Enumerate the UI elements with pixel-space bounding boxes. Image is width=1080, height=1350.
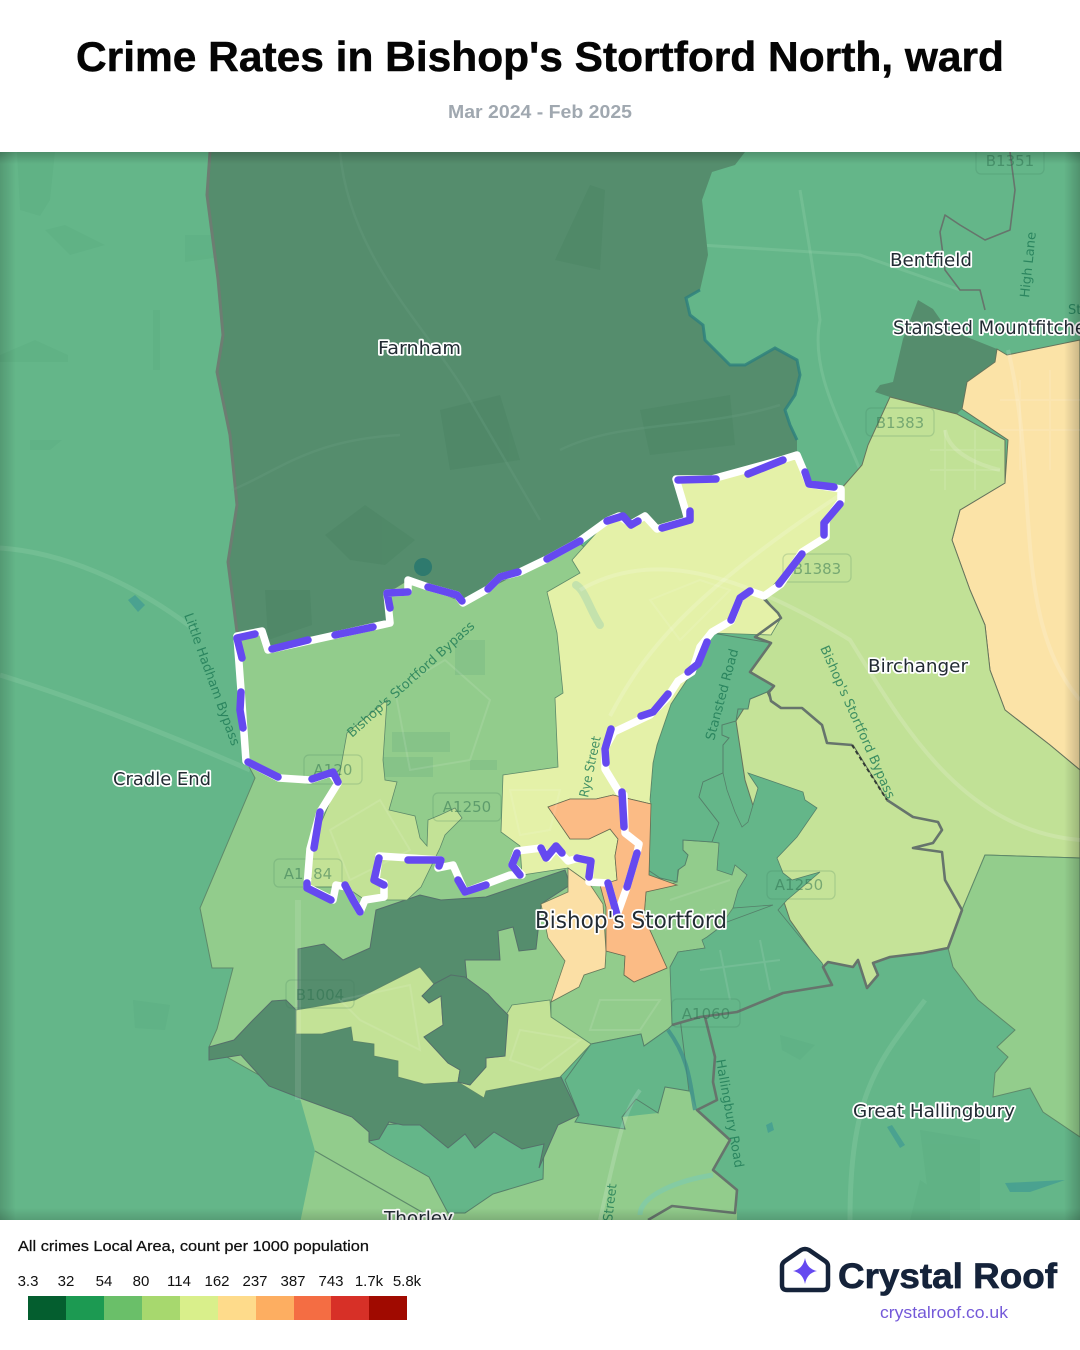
local roads and street texture <box>298 350 1080 1220</box>
road names <box>180 231 1080 1222</box>
water: lower river <box>668 1030 695 1110</box>
road shields <box>274 146 1044 1027</box>
road shields: A1250 <box>443 798 491 816</box>
legend scale labels: 5.8k <box>393 1273 422 1290</box>
region: dark middle <box>422 975 508 1085</box>
region: south-east teal <box>670 773 832 1025</box>
region: ward pale yellow-green <box>501 455 841 884</box>
title: Crime Rates in Bishop's Stortford North, ward <box>76 33 1004 80</box>
logo: Crystal Roof <box>782 1249 1057 1322</box>
faint background roads <box>0 190 960 1220</box>
region: lower Birchanger <box>736 692 962 988</box>
Farnham west boundary <box>207 152 237 632</box>
road names: High Lane <box>1018 231 1040 298</box>
place labels <box>113 250 1080 1229</box>
region: A120 yellow-green <box>307 700 462 900</box>
legend scale labels: 162 <box>204 1273 230 1290</box>
region: broad light green base <box>200 542 700 1098</box>
place labels: Farnham <box>378 338 461 359</box>
darker patches in west ward <box>383 640 497 777</box>
region: central orange high crime <box>548 795 677 982</box>
region: Farnham dark <box>207 152 800 650</box>
legend scale labels <box>18 1273 422 1290</box>
place labels: Thorley <box>383 1208 453 1229</box>
legend scale labels: 743 <box>318 1273 344 1290</box>
legend scale labels: 237 <box>242 1273 268 1290</box>
region: dark south snake <box>209 1000 579 1168</box>
region: centre-south teal <box>565 1018 689 1129</box>
road shields: A120 <box>314 761 352 779</box>
road names: Little Hadham Bypass <box>180 611 242 748</box>
road names: Stansted Road <box>703 647 742 742</box>
map edge vignette <box>0 152 1080 1220</box>
legend scale labels: 54 <box>96 1273 112 1290</box>
legend scale labels: 80 <box>133 1273 149 1290</box>
parish boundaries, dark grey <box>648 152 1015 1220</box>
road shields: B1351 <box>986 152 1034 170</box>
road names: Bishop's Stortford Bypass <box>816 644 898 801</box>
place labels: Cradle End <box>113 769 211 790</box>
region: south light green <box>300 1087 737 1223</box>
Farnham fields texture <box>265 185 735 640</box>
road names: Rye Street <box>577 735 605 799</box>
road names: Street <box>601 1183 621 1222</box>
region: south teal <box>369 1120 544 1213</box>
legend scale labels: 114 <box>167 1273 191 1290</box>
road shields: B1383 <box>876 414 924 432</box>
road shields: A1060 <box>682 1005 730 1023</box>
region: Stansted Road teal strip <box>648 633 774 882</box>
region: south-east light green <box>948 855 1080 1137</box>
place labels: Bishop's Stortford <box>535 908 727 934</box>
legend colour bar <box>28 1296 407 1320</box>
legend scale labels: 3.3 <box>18 1273 38 1290</box>
place labels: Birchanger <box>868 656 969 677</box>
region: Birchanger <box>750 397 1080 910</box>
region: dark upper <box>298 870 570 1010</box>
region: Stansted dark <box>875 300 997 414</box>
ward boundary: Bishop's Stortford North <box>237 455 841 915</box>
wordmark: Crystal Roof <box>838 1257 1057 1296</box>
legend scale labels: 387 <box>280 1273 306 1290</box>
region: central light green <box>551 840 747 1046</box>
road shields: A1184 <box>284 865 332 883</box>
subtitle: date range: Mar 2024 - Feb 2025 <box>448 102 632 122</box>
road shields: B1383 <box>793 560 841 578</box>
road shields: A1250 <box>775 876 823 894</box>
legend scale labels: 32 <box>58 1273 74 1290</box>
road names: Bishop's Stortford Bypass <box>345 619 478 741</box>
region: south yellow-green <box>296 967 460 1084</box>
road names: Hallingbury Road <box>712 1058 746 1169</box>
legend <box>18 1238 422 1320</box>
legend title: All crimes Local Area, count per 1000 population <box>18 1238 369 1255</box>
place labels: Bentfield <box>890 250 972 271</box>
pond <box>576 585 600 625</box>
region: central peach <box>541 868 606 1002</box>
icon: house with star <box>782 1249 828 1290</box>
road shields: B1004 <box>296 986 344 1004</box>
website url: crystalroof.co.uk <box>880 1304 1009 1322</box>
legend scale labels: 1.7k <box>355 1273 384 1290</box>
river along Farnham edge <box>686 290 800 440</box>
region: east peach <box>952 340 1080 770</box>
place labels: Great Hallingbury <box>853 1101 1015 1122</box>
